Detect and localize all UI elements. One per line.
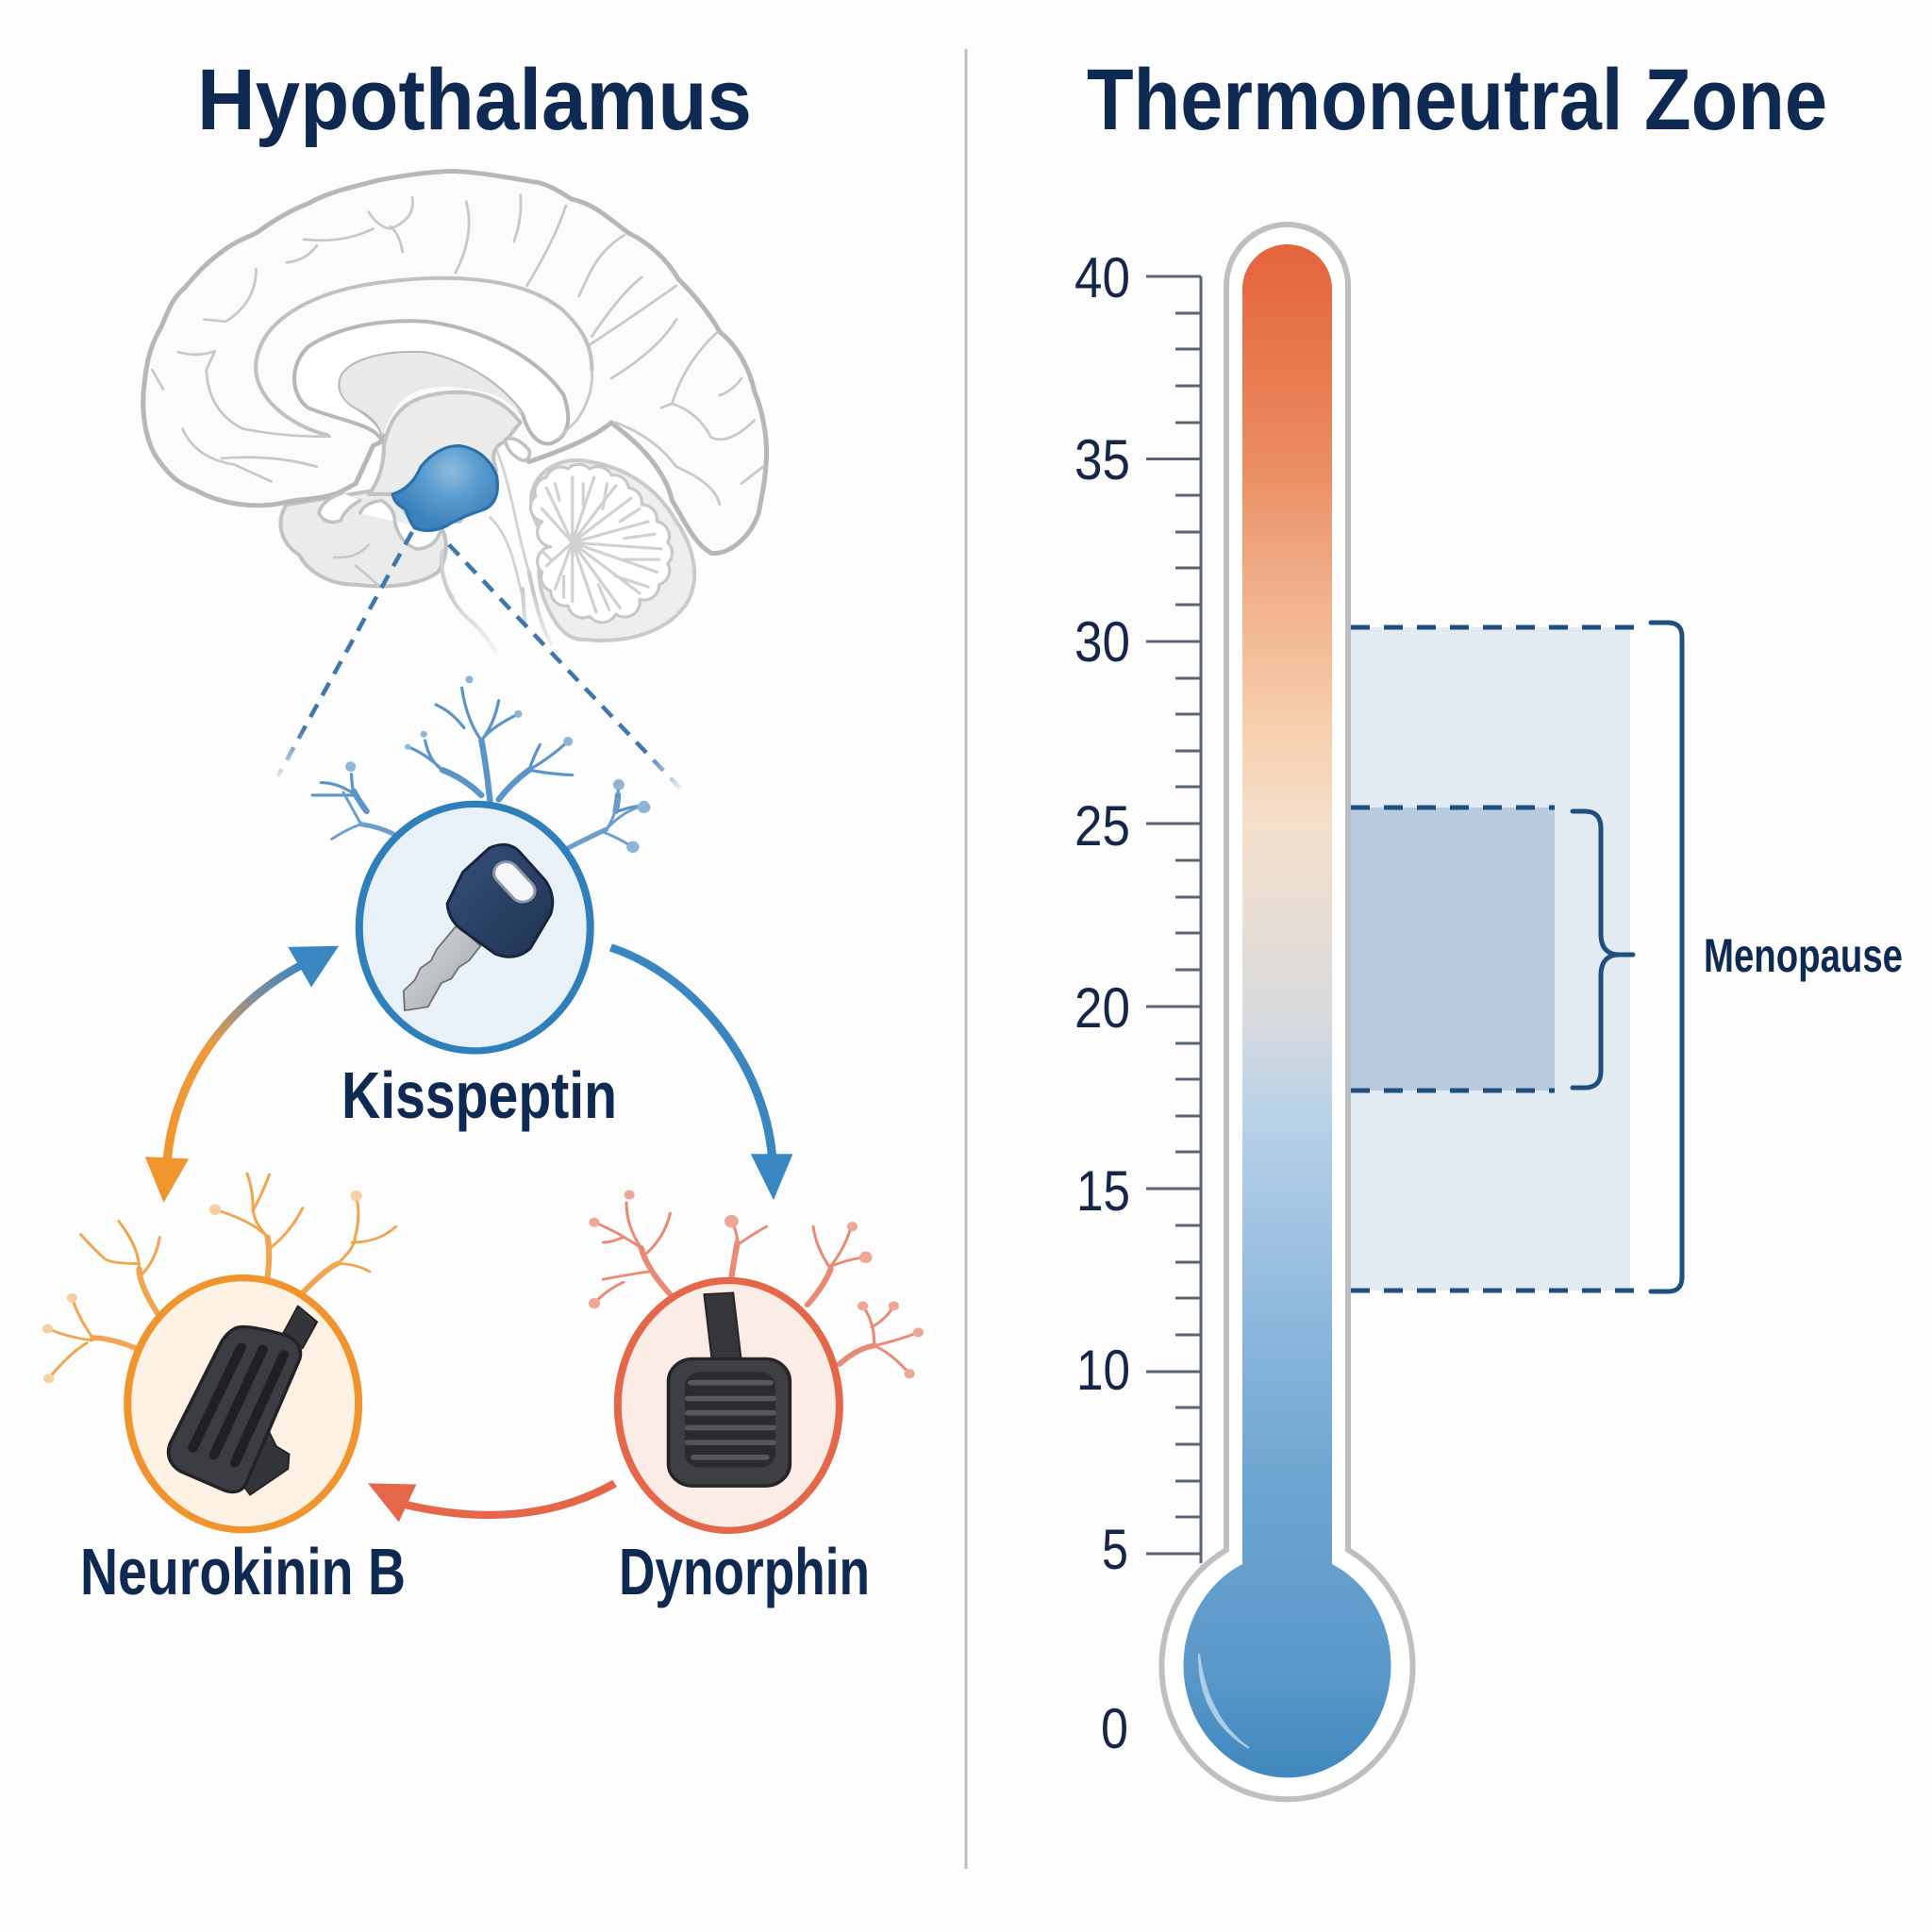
illustration: brain cross-section xyxy=(143,171,767,811)
scale numbers xyxy=(1074,246,1130,1760)
brain: thalamus shading xyxy=(340,353,523,435)
neuron: Neurokinin B xyxy=(127,1278,358,1530)
brain: sulci xyxy=(152,195,763,585)
scale numbers: 40 xyxy=(1074,246,1130,309)
cycle diagram: neurons and arrows xyxy=(42,792,924,1530)
thermometer xyxy=(1162,225,1413,1799)
brain: central structure xyxy=(369,392,521,522)
scale numbers: 35 xyxy=(1074,428,1130,491)
icon: brake pedal xyxy=(669,1292,790,1486)
zoom guide lines xyxy=(277,532,681,789)
dashed range lines xyxy=(1351,627,1634,1291)
title: Hypothalamus: Hypothalamus xyxy=(197,52,752,148)
orange dendrites xyxy=(42,1174,396,1383)
arrow: Dynorphin to Neurokinin B xyxy=(368,1483,615,1522)
thermometer fluid xyxy=(1183,244,1391,1777)
scale numbers: 15 xyxy=(1076,1159,1130,1223)
divider xyxy=(964,49,968,1869)
blue dendrites lower xyxy=(332,792,650,853)
brain: cerebellum xyxy=(531,460,694,641)
icon: key xyxy=(404,844,553,1010)
darker band: menopause range xyxy=(1348,808,1555,1091)
scale ticks xyxy=(1146,276,1201,1563)
scale numbers: 10 xyxy=(1076,1339,1130,1402)
icon: accelerator pedal xyxy=(169,1306,317,1495)
arrow: Neurokinin B and Kisspeptin two-way xyxy=(145,946,339,1203)
brain: cingulate band xyxy=(256,278,591,435)
bracket: outer xyxy=(1651,623,1682,1291)
brain: cerebellum folia xyxy=(530,464,673,623)
brain: cerebrum outline xyxy=(143,171,767,554)
blue dendrites upper xyxy=(312,675,649,811)
highlighted hypothalamus xyxy=(392,445,497,530)
brain: brainstem xyxy=(441,551,551,658)
brain: lower lobes xyxy=(319,439,529,549)
bulb highlight xyxy=(1199,1654,1249,1748)
panel: thermoneutral zone xyxy=(1074,52,1903,1799)
thermometer glass xyxy=(1162,225,1413,1799)
neuron: Kisspeptin xyxy=(359,804,591,1051)
label: Neurokinin B: Neurokinin B xyxy=(80,1535,406,1608)
scale numbers: 25 xyxy=(1074,794,1130,858)
neuron: Dynorphin xyxy=(618,1280,840,1530)
brain: temporal region xyxy=(281,488,446,586)
title: Thermoneutral Zone: Thermoneutral Zone xyxy=(1087,52,1827,148)
brace: inner xyxy=(1573,811,1633,1088)
arrow: Kisspeptin to Dynorphin xyxy=(610,947,792,1200)
brain: corpus callosum xyxy=(294,321,568,443)
scale numbers: 0 xyxy=(1101,1697,1128,1760)
label: Dynorphin: Dynorphin xyxy=(619,1535,870,1608)
scale numbers: 20 xyxy=(1074,976,1130,1040)
red dendrites xyxy=(589,1190,924,1378)
scale numbers: 5 xyxy=(1102,1518,1128,1581)
label: Kisspeptin: Kisspeptin xyxy=(341,1058,617,1132)
panel: hypothalamus xyxy=(42,52,924,1608)
scale numbers: 30 xyxy=(1074,610,1130,674)
light band: full thermoneutral range xyxy=(1348,627,1630,1291)
